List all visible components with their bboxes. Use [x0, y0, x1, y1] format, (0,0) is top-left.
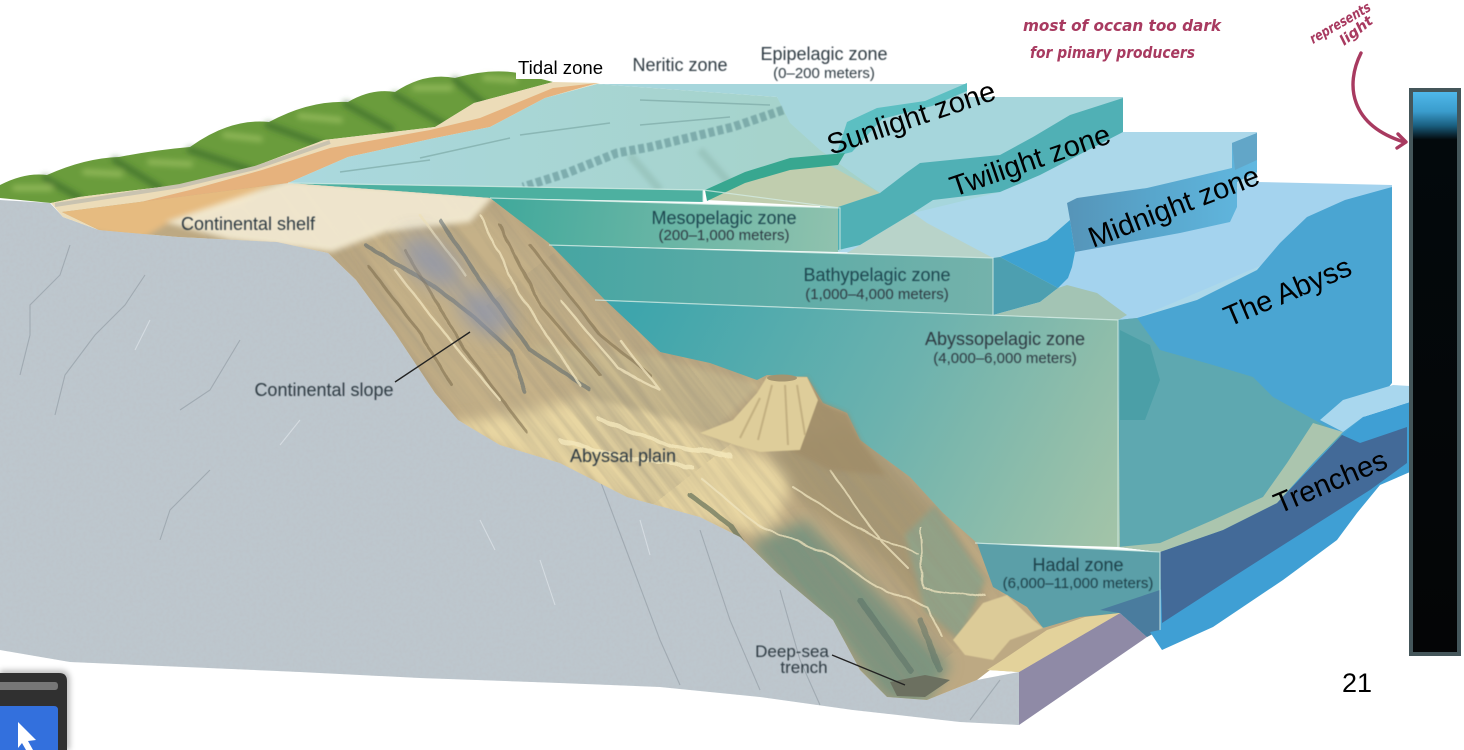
region right of bathypelagic face — [993, 220, 1127, 320]
shelf sand over stripes — [50, 175, 495, 252]
label: tidal zone: Tidal zone — [518, 57, 603, 78]
light meter bar — [1409, 88, 1461, 656]
label: deep-sea trench with leader: Deep-sea — [755, 642, 829, 661]
midnight band — [1067, 133, 1257, 252]
page number: 21 — [1342, 668, 1372, 698]
label: bathypelagic zone: (1,000–4,000 meters) — [805, 286, 949, 303]
label: abyssopelagic zone: Abyssopelagic zone — [925, 329, 1085, 349]
sediment plume — [393, 225, 520, 345]
arrow to light meter — [1353, 53, 1406, 148]
handwritten note: most of ocean too dark: most of occan too dark — [1023, 16, 1222, 35]
sand ledge at trench wall — [987, 613, 1120, 672]
label: abyssal plain: Abyssal plain — [570, 446, 676, 466]
mesopelagic face — [490, 198, 838, 252]
handwritten note: most of ocean too dark — [1023, 16, 1222, 62]
label: deep-sea trench with leader — [755, 642, 905, 685]
abyssopelagic face — [595, 300, 1120, 547]
label: bathypelagic zone — [803, 265, 951, 303]
icon: cursor — [18, 722, 36, 750]
label: mesopelagic zone — [651, 208, 797, 244]
rock block side face — [1019, 613, 1147, 725]
label: hadal zone: Hadal zone — [1032, 555, 1124, 575]
zone edge lines — [288, 183, 1160, 630]
ridges and ravines — [368, 215, 987, 690]
translucent trench wall band — [1118, 423, 1343, 552]
label: continental slope with leader: Continental slope — [254, 380, 394, 400]
terrain stripes upper slope — [360, 206, 730, 504]
toolbar widget — [0, 670, 70, 750]
rocky strip and beach — [51, 82, 600, 230]
label: hadal zone: (6,000–11,000 meters) — [1003, 575, 1153, 592]
sunlight band on right — [836, 83, 967, 156]
label: deep-sea trench with leader: trench — [780, 658, 828, 677]
label: continental slope with leader — [254, 332, 470, 400]
handwritten note: most of ocean too dark: for pimary producers — [1030, 43, 1195, 62]
terrain colour patches — [360, 215, 985, 705]
trench floor rubble — [890, 675, 950, 697]
label: sunlight zone: Sunlight zone — [823, 75, 1000, 162]
label: epipelagic zone — [760, 44, 888, 82]
hadal zone face — [975, 543, 1160, 637]
rock block front face — [0, 200, 1019, 725]
label: midnight zone: Midnight zone — [1084, 160, 1264, 255]
label: twilight zone: Twilight zone — [946, 119, 1115, 204]
label: epipelagic zone: Epipelagic zone — [760, 44, 888, 64]
label: hadal zone — [1003, 555, 1153, 592]
label: trenches: Trenches — [1269, 444, 1392, 520]
sunlight band arc — [705, 153, 845, 201]
label: abyssopelagic zone: (4,000–6,000 meters) — [933, 350, 1077, 367]
volcano seamount — [700, 374, 885, 475]
label: mesopelagic zone: (200–1,000 meters) — [659, 227, 789, 244]
small seamount near trench — [953, 595, 1043, 660]
bathypelagic face — [545, 245, 993, 315]
label: mesopelagic zone: Mesopelagic zone — [651, 208, 797, 228]
label: epipelagic zone: (0–200 meters) — [773, 65, 875, 82]
submerged slope seen through the abyss band — [1118, 318, 1342, 552]
label: neritic zone: Neritic zone — [632, 55, 728, 75]
twilight band — [838, 98, 1123, 250]
terrain through water under twilight band — [847, 213, 993, 258]
upper light water surfaces — [597, 84, 1392, 320]
terrain stripes lower slope — [506, 257, 932, 632]
shelf under shallow water — [288, 84, 880, 207]
label: abyssopelagic zone — [925, 329, 1085, 367]
abyss zone right band — [1118, 187, 1392, 552]
label: bathypelagic zone: Bathypelagic zone — [803, 265, 951, 285]
trench water right face — [1150, 385, 1410, 650]
label: continental shelf: Continental shelf — [181, 214, 316, 234]
land: green hills — [0, 71, 553, 203]
seafloor terrain — [62, 183, 1120, 700]
handwritten note: represents light: light — [1337, 12, 1377, 49]
label: the abyss: The Abyss — [1219, 251, 1356, 333]
epipelagic bottom strip — [288, 183, 703, 202]
